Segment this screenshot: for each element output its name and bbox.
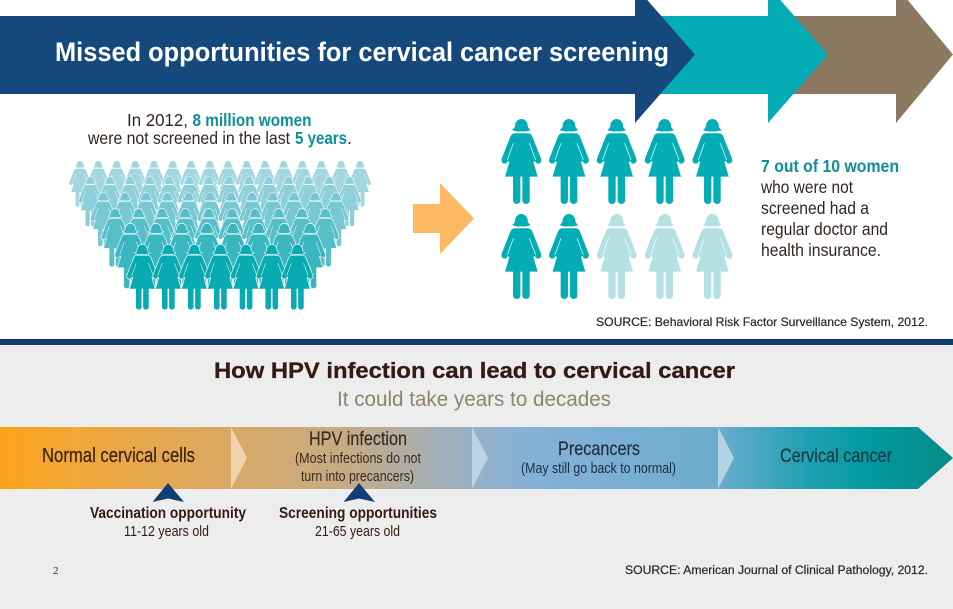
chevron 3 bbox=[718, 427, 734, 489]
panel: lower background bbox=[0, 345, 953, 609]
marker: screening bbox=[344, 483, 375, 502]
text block: 8 million women: 8 million women bbox=[192, 110, 312, 130]
stage: precancers bbox=[521, 438, 676, 477]
arrow: brown bbox=[760, 0, 953, 123]
text block: 7 out of 10 women: who were not bbox=[760, 177, 853, 197]
stage: cervical cancer: Cervical cancer bbox=[780, 445, 892, 467]
text block: 8 million women: were not screened in the last bbox=[87, 128, 290, 148]
arrow: navy title banner bbox=[0, 0, 695, 123]
chart: progression arrow bbox=[0, 427, 953, 489]
marker: vaccination bbox=[152, 483, 184, 502]
arrow: orange bbox=[413, 183, 474, 254]
stage: normal cells: Normal cervical cells bbox=[42, 445, 195, 467]
divider bar bbox=[0, 339, 953, 345]
label: vaccination opportunity: Vaccination opportunity bbox=[90, 505, 246, 522]
chart: crowd of women bbox=[69, 161, 371, 310]
label: vaccination opportunity bbox=[90, 505, 246, 540]
heading: HPV: How HPV infection can lead to cervical cancer bbox=[214, 358, 735, 383]
stage: precancers: Precancers bbox=[558, 438, 640, 460]
text block: 8 million women: . bbox=[347, 128, 352, 148]
stage: HPV infection: (Most infections do not bbox=[295, 451, 421, 467]
stage: HPV infection: turn into precancers) bbox=[301, 469, 414, 485]
stage: HPV infection bbox=[295, 428, 421, 485]
page number: 2 bbox=[53, 565, 58, 577]
title: Missed opportunities for cervical cancer screening bbox=[55, 37, 669, 67]
text block: 7 out of 10 women: 7 out of 10 women bbox=[761, 156, 899, 176]
source: AJCP: SOURCE: American Journal of Clinical Pathology, 2012. bbox=[625, 565, 928, 577]
source: BRFSS: SOURCE: Behavioral Risk Factor Surveillance System, 2012. bbox=[596, 315, 928, 329]
chevron 1 bbox=[231, 427, 247, 489]
chart: 7 of 10 women pictogram bbox=[501, 119, 732, 299]
text block: 7 out of 10 women: screened had a bbox=[761, 198, 869, 218]
label: screening opportunities: 21-65 years old bbox=[315, 523, 400, 540]
label: vaccination opportunity: 11-12 years old bbox=[124, 523, 209, 540]
stage: HPV infection: HPV infection bbox=[309, 428, 407, 450]
text block: 8 million women bbox=[87, 110, 352, 148]
text block: 8 million women: In 2012, bbox=[127, 110, 188, 130]
stage: precancers: (May still go back to normal) bbox=[521, 461, 676, 477]
text block: 7 out of 10 women: regular doctor and bbox=[761, 219, 888, 239]
text block: 7 out of 10 women bbox=[760, 156, 899, 260]
label: screening opportunities bbox=[279, 505, 437, 540]
text block: 7 out of 10 women: health insurance. bbox=[761, 240, 881, 260]
label: screening opportunities: Screening opportunities bbox=[279, 505, 437, 522]
subheading: It could take years to decades bbox=[337, 387, 611, 411]
arrow: teal bbox=[620, 0, 828, 123]
chevron 2 bbox=[472, 427, 488, 489]
text block: 8 million women: 5 years bbox=[295, 128, 347, 148]
